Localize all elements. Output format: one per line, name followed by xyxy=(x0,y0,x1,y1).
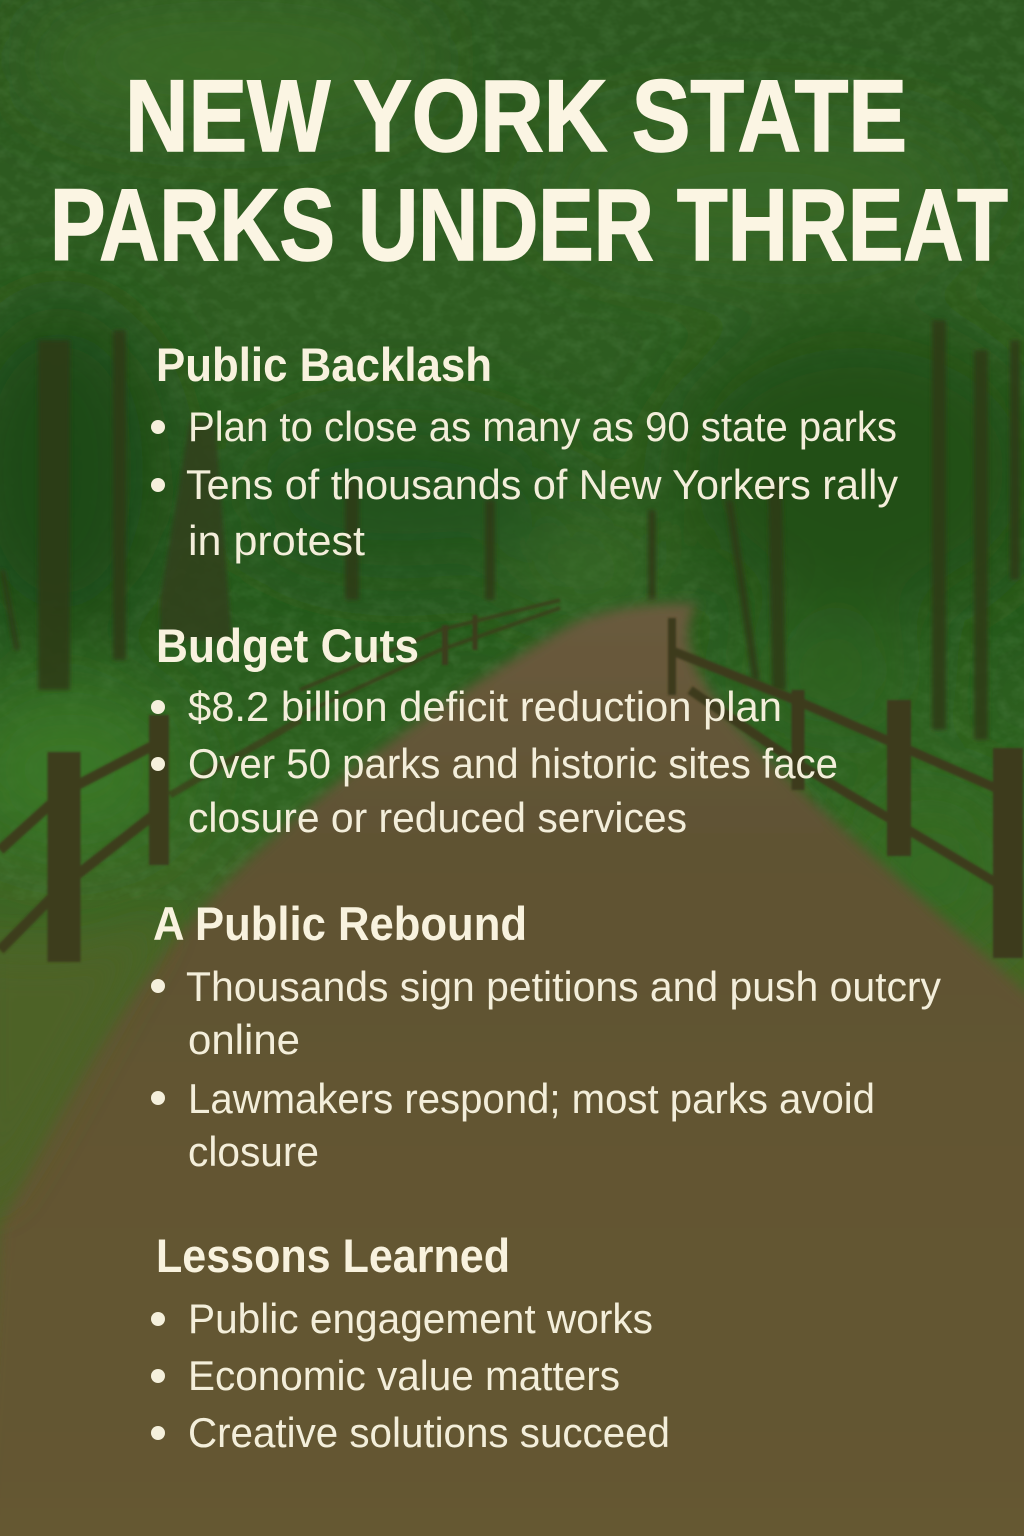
section: A Public Rebound xyxy=(151,897,941,1175)
bullet list: Public Backlash: Tens of thousands of New Yorkers rally xyxy=(186,461,898,508)
bullet list: Public Backlash: Plan to close as many as 90 state parks xyxy=(188,403,897,450)
section: Lessons Learned xyxy=(151,1229,670,1456)
section: Public Backlash xyxy=(151,338,898,564)
heading: Public Backlash: Public Backlash xyxy=(156,338,492,391)
left fence xyxy=(0,600,560,962)
bullet list: Lessons Learned: Economic value matters xyxy=(188,1352,620,1399)
heading: Budget Cuts: Budget Cuts xyxy=(156,619,419,672)
title: NEW YORK STATE xyxy=(125,59,907,173)
section: Budget Cuts xyxy=(151,619,838,841)
bullet list: Lessons Learned: Public engagement works xyxy=(188,1295,653,1342)
bullet list: A Public Rebound: online xyxy=(188,1016,300,1063)
bullet list: Public Backlash xyxy=(151,403,898,564)
bullet list: Budget Cuts: closure or reduced services xyxy=(188,794,687,841)
bullet list: Lessons Learned xyxy=(151,1295,670,1456)
grass verge lower left xyxy=(0,910,170,1200)
bullet list: Budget Cuts: $8.2 billion deficit reduction plan xyxy=(188,683,782,730)
heading: Lessons Learned: Lessons Learned xyxy=(156,1229,510,1282)
dirt trail xyxy=(0,603,1024,1536)
bullet list: A Public Rebound: closure xyxy=(188,1128,319,1175)
heading: A Public Rebound: A Public Rebound xyxy=(153,897,527,950)
bullet list: A Public Rebound: Lawmakers respond; most parks avoid xyxy=(188,1075,875,1122)
bullet list: A Public Rebound: Thousands sign petitions and push outcry xyxy=(186,963,941,1010)
right fence xyxy=(670,618,1008,958)
bullet list: Lessons Learned: Creative solutions succeed xyxy=(188,1409,670,1456)
bullet list: Public Backlash: in protest xyxy=(188,517,365,564)
bullet list: Budget Cuts xyxy=(151,683,838,841)
dark canopy areas xyxy=(0,0,1024,960)
title xyxy=(50,59,1008,282)
bullet list: Budget Cuts: Over 50 parks and historic sites face xyxy=(188,740,838,787)
tree trunks xyxy=(0,320,1020,740)
bullet list: A Public Rebound xyxy=(151,963,941,1175)
